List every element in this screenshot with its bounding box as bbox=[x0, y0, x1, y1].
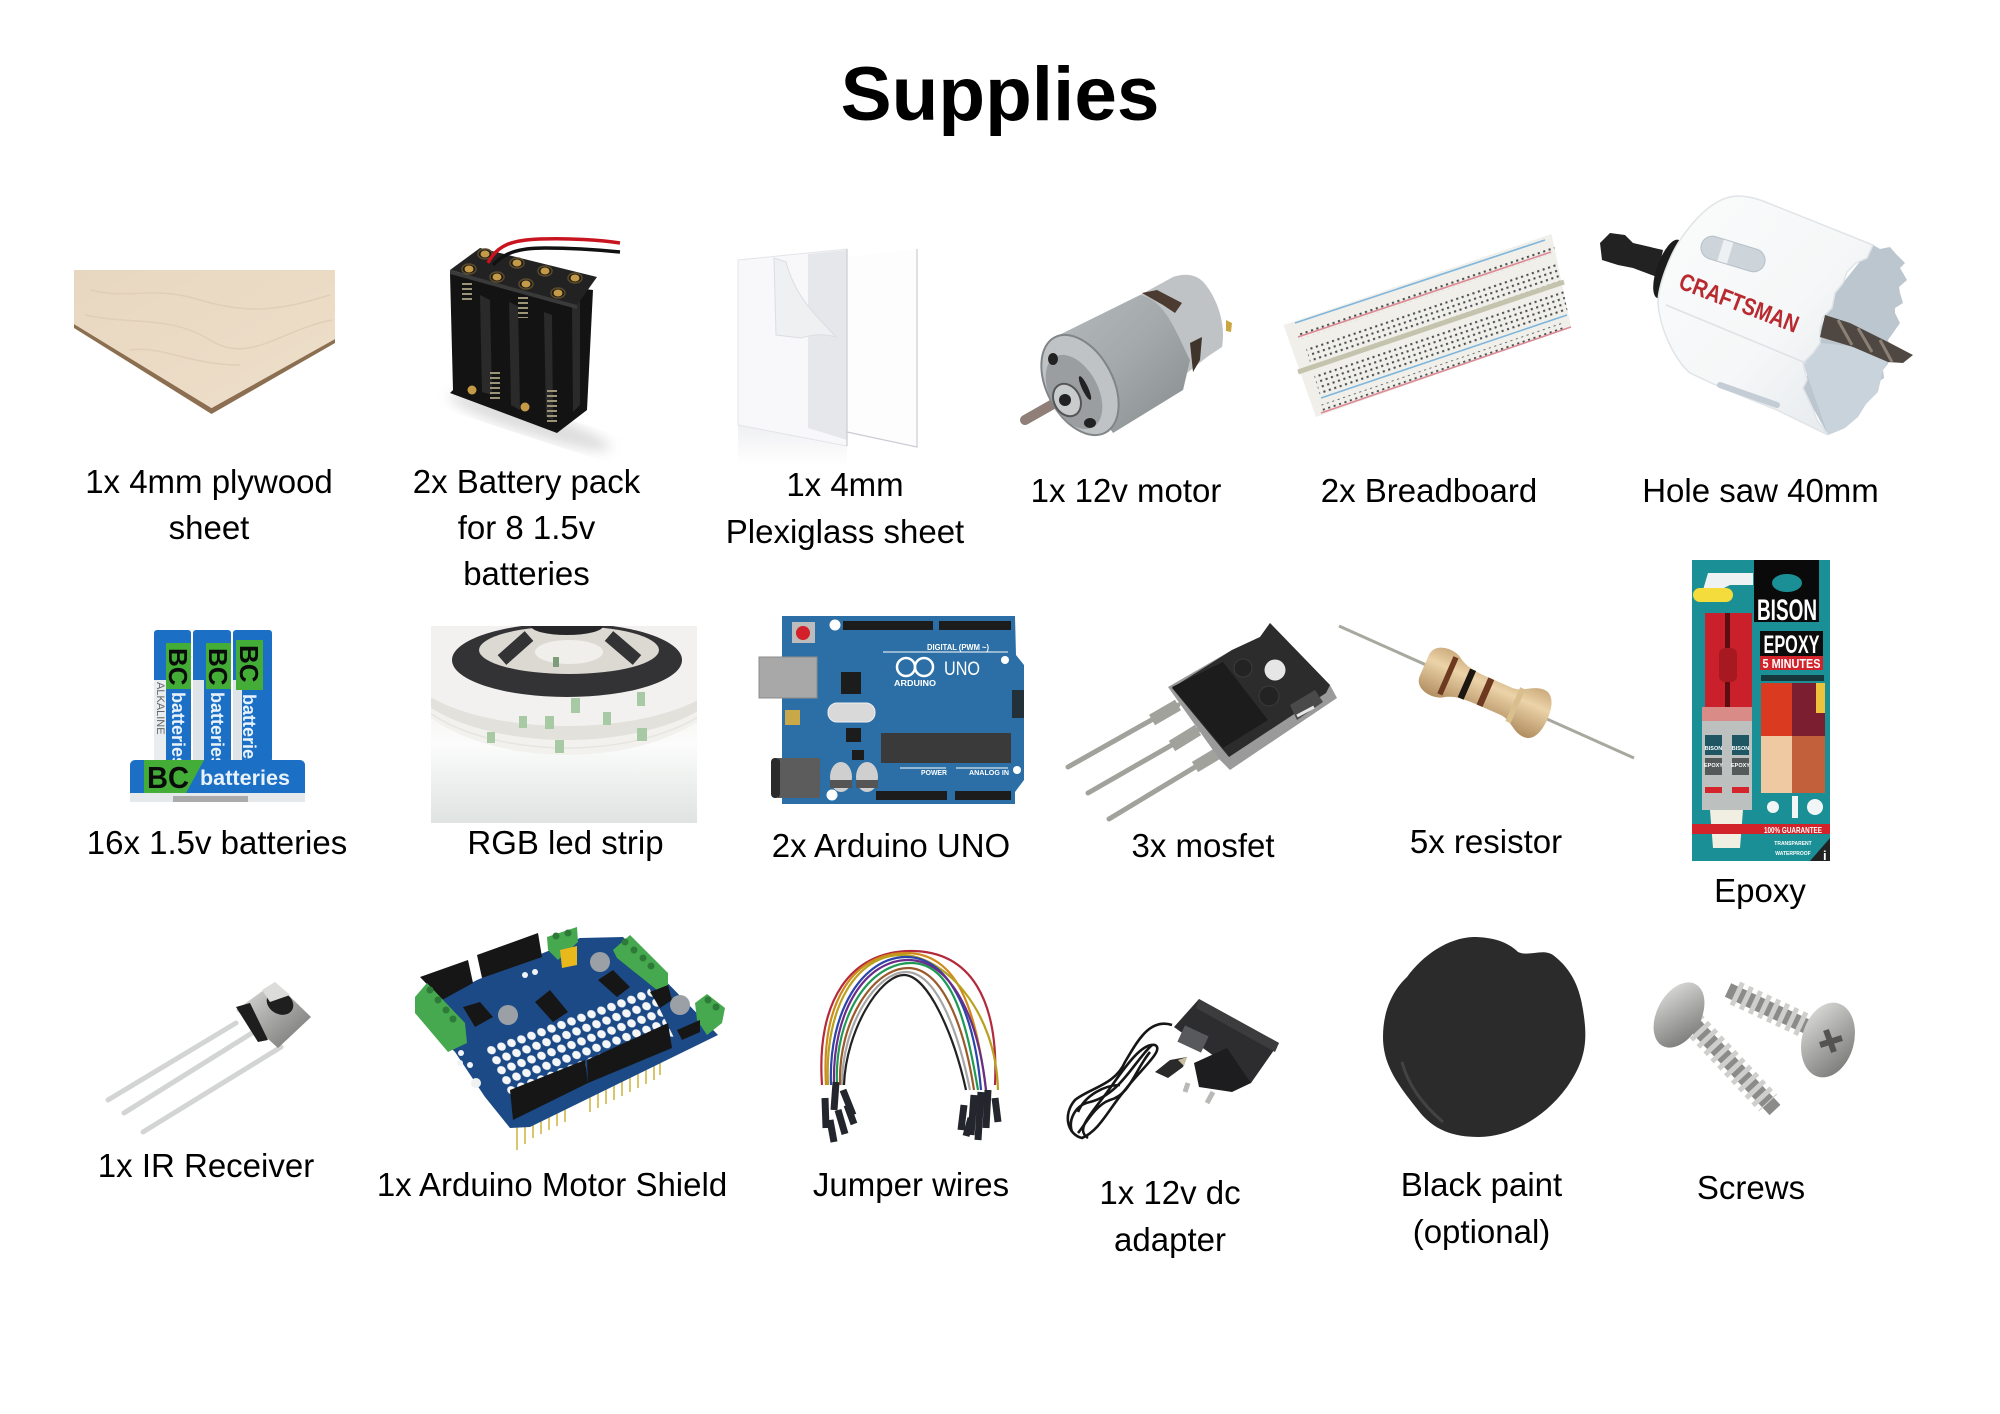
icon: led strip reel bbox=[431, 626, 697, 823]
label: breadboard: 2x Breadboard bbox=[1321, 472, 1537, 509]
icon: motor shield board bbox=[415, 927, 725, 1150]
icon: breadboard bbox=[1284, 234, 1580, 417]
icon: epoxy package bbox=[1692, 560, 1830, 863]
icon: plexiglass sheets bbox=[738, 249, 917, 466]
panel: batteries bbox=[87, 630, 347, 861]
icon: IR receiver bbox=[108, 982, 311, 1132]
icon: hole saw: CRAFTSMAN bbox=[1675, 268, 1802, 339]
label: motor shield: 1x Arduino Motor Shield bbox=[377, 1166, 727, 1203]
icon: Arduino board: POWER bbox=[921, 770, 947, 777]
icon: AA batteries: BC bbox=[147, 760, 189, 795]
icon: Arduino board: ANALOG IN bbox=[969, 770, 1009, 777]
label: RGB led strip: RGB led strip bbox=[467, 824, 664, 861]
panel: Arduino UNO bbox=[759, 616, 1024, 864]
label: epoxy: Epoxy bbox=[1714, 872, 1806, 909]
panel: resistor bbox=[1339, 626, 1634, 860]
panel: motor shield bbox=[377, 927, 727, 1203]
icon: epoxy package: EPOXY bbox=[1764, 631, 1820, 659]
icon: AA batteries: batteries bbox=[207, 692, 227, 767]
label: black paint: (optional) bbox=[1413, 1213, 1550, 1250]
icon: mosfet bbox=[1068, 623, 1337, 819]
label: resistor: 5x resistor bbox=[1410, 823, 1562, 860]
icon: epoxy package: BISON bbox=[1705, 746, 1722, 752]
panel: adapter bbox=[1068, 999, 1279, 1258]
panel: screws bbox=[1643, 974, 1863, 1206]
panel: black paint bbox=[1383, 937, 1585, 1250]
label: batteries: 16x 1.5v batteries bbox=[87, 824, 347, 861]
panel: breadboard bbox=[1284, 234, 1580, 509]
label: battery pack: 2x Battery pack bbox=[413, 463, 641, 500]
icon: screws bbox=[1643, 974, 1863, 1110]
icon: plywood sheet bbox=[74, 270, 335, 414]
icon: epoxy package: i bbox=[1823, 848, 1827, 863]
icon: battery holder bbox=[445, 239, 620, 460]
icon: AA batteries: ALKALINE bbox=[154, 682, 166, 735]
panel: motor bbox=[1025, 275, 1232, 509]
icon: AA batteries: batteries bbox=[168, 692, 188, 767]
icon: AA batteries: BC bbox=[163, 648, 193, 686]
panel: plexiglass bbox=[726, 249, 964, 550]
icon: epoxy package: 5 MINUTES bbox=[1762, 656, 1821, 671]
icon: epoxy package: WATERPROOF bbox=[1775, 851, 1811, 857]
label: plywood: 1x 4mm plywood bbox=[85, 463, 333, 500]
icon: Arduino board: DIGITAL (PWM ~) bbox=[927, 643, 989, 652]
panel: epoxy bbox=[1692, 560, 1830, 909]
icon: AA batteries: BC bbox=[203, 648, 233, 686]
label: battery pack: for 8 1.5v bbox=[458, 509, 596, 546]
icon: jumper wires bbox=[821, 951, 998, 1142]
icon: dc motor bbox=[1025, 275, 1232, 448]
title: Supplies bbox=[841, 52, 1159, 137]
label: screws: Screws bbox=[1697, 1169, 1805, 1206]
icon: Arduino board: UNO bbox=[944, 659, 980, 680]
panel: hole saw bbox=[1600, 196, 1913, 509]
label: adapter: 1x 12v dc bbox=[1099, 1174, 1241, 1211]
icon: paint blob bbox=[1383, 937, 1585, 1137]
icon: power adapter bbox=[1068, 999, 1279, 1138]
label: motor: 1x 12v motor bbox=[1031, 472, 1221, 509]
icon: Arduino board bbox=[759, 616, 1024, 804]
label: black paint: Black paint bbox=[1401, 1166, 1562, 1203]
panel: RGB led strip bbox=[431, 626, 697, 861]
icon: epoxy package: TRANSPARENT bbox=[1774, 841, 1812, 847]
icon: hole saw bbox=[1600, 196, 1913, 435]
label: IR receiver: 1x IR Receiver bbox=[98, 1147, 314, 1184]
panel: mosfet bbox=[1068, 623, 1337, 864]
label: Arduino UNO: 2x Arduino UNO bbox=[772, 827, 1010, 864]
icon: epoxy package: BISON bbox=[1732, 746, 1749, 752]
icon: AA batteries: batteries bbox=[200, 767, 290, 790]
panel: jumper wires bbox=[813, 951, 1009, 1203]
panel: battery pack bbox=[413, 239, 641, 592]
icon: epoxy package: 100% GUARANTEE bbox=[1764, 825, 1822, 835]
label: plexiglass: Plexiglass sheet bbox=[726, 513, 964, 550]
label: battery pack: batteries bbox=[463, 555, 590, 592]
label: adapter: adapter bbox=[1114, 1221, 1226, 1258]
icon: epoxy package: EPOXY bbox=[1731, 763, 1750, 769]
panel: IR receiver bbox=[98, 982, 314, 1184]
icon: Arduino board: ARDUINO bbox=[894, 679, 936, 688]
panel: plywood bbox=[74, 270, 335, 546]
icon: AA batteries bbox=[130, 630, 305, 802]
label: plywood: sheet bbox=[169, 509, 249, 546]
icon: resistor bbox=[1339, 626, 1634, 758]
icon: AA batteries: batteries bbox=[239, 694, 259, 769]
label: mosfet: 3x mosfet bbox=[1131, 827, 1275, 864]
label: jumper wires: Jumper wires bbox=[813, 1166, 1009, 1203]
label: plexiglass: 1x 4mm bbox=[786, 466, 904, 503]
icon: epoxy package: EPOXY bbox=[1704, 763, 1723, 769]
label: hole saw: Hole saw 40mm bbox=[1642, 472, 1879, 509]
icon: epoxy package: BISON bbox=[1757, 594, 1817, 627]
icon: AA batteries: BC bbox=[234, 645, 264, 683]
